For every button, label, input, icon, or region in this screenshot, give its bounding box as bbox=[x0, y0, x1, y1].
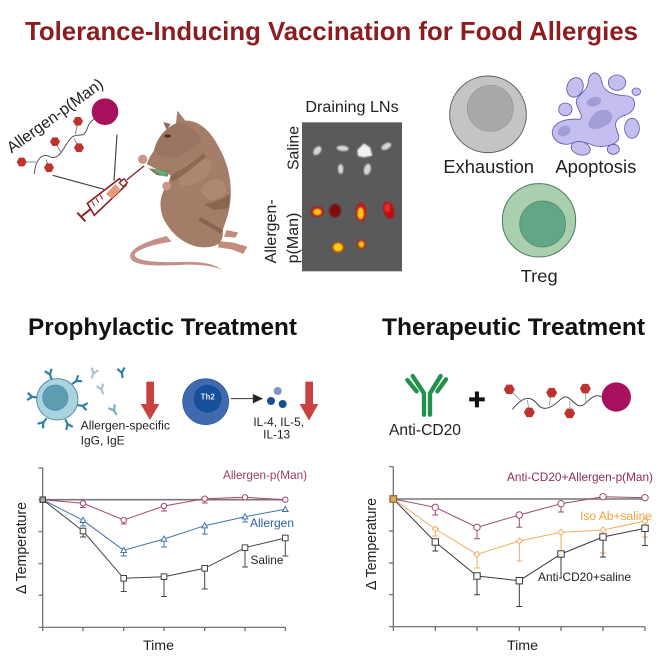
label: Anti-CD20+saline: Anti-CD20+saline bbox=[538, 570, 631, 584]
icon: mouse bbox=[130, 111, 247, 270]
baseline bbox=[393, 498, 645, 500]
first data point bbox=[40, 497, 45, 502]
zoom lines bbox=[53, 135, 117, 189]
icon: cytokines bbox=[267, 387, 287, 408]
plus sign: + bbox=[468, 383, 486, 416]
axes bbox=[38, 468, 285, 631]
icon: Th2 cell bbox=[183, 379, 229, 425]
label: Exhaustion: Exhaustion bbox=[443, 156, 534, 177]
chart: prophylactic temperature bbox=[14, 468, 307, 653]
label: Treg: Treg bbox=[521, 266, 558, 286]
x-axis label: Time bbox=[507, 637, 538, 653]
series: Allergen-p(Man) bbox=[43, 495, 288, 524]
panel: cell outcomes bbox=[443, 73, 641, 286]
baseline bbox=[43, 499, 285, 501]
arrow: Th2 to cytokines bbox=[231, 395, 262, 403]
label: Allergen-p(Man): Allergen-p(Man) bbox=[223, 469, 307, 482]
arrow: decrease in cytokines bbox=[300, 382, 318, 421]
series: Allergen bbox=[43, 500, 288, 556]
panel: draining lymph nodes bbox=[263, 99, 402, 271]
icon: polymer conjugate bbox=[504, 382, 631, 418]
panel: prophylactic mechanism bbox=[27, 368, 318, 448]
icon: apoptotic cell bbox=[552, 73, 641, 157]
series: Saline bbox=[43, 500, 288, 596]
series: Anti-CD20+saline bbox=[393, 499, 648, 606]
panel: vaccination illustration bbox=[4, 76, 247, 270]
icon: B cell with antibodies bbox=[27, 368, 126, 430]
y-axis label: Δ Temperature bbox=[364, 498, 380, 590]
label: Saline: Saline bbox=[286, 126, 303, 170]
label: IL-4, IL-5, IL-13: IL-4, IL-5, bbox=[253, 415, 304, 429]
icon: Treg cell bbox=[502, 184, 576, 257]
icon: exhausted cell bbox=[450, 76, 526, 153]
heading: Prophylactic Treatment: Prophylactic Treatment bbox=[28, 314, 297, 341]
label: Apoptosis: Apoptosis bbox=[555, 156, 636, 177]
image: lymph node scan bbox=[302, 122, 402, 271]
icon: syringe bbox=[77, 166, 144, 221]
icon: Th2 cell: Th2 bbox=[201, 393, 215, 402]
label: Allergen-p(Man): Allergen-p(Man) bbox=[4, 76, 107, 157]
icon: polymer conjugate bbox=[17, 98, 118, 174]
x-axis label: Time bbox=[143, 637, 174, 653]
arrow: decrease in antibodies bbox=[141, 382, 159, 420]
label: Anti-CD20+Allergen-p(Man): Anti-CD20+Allergen-p(Man) bbox=[507, 470, 653, 484]
heading: Therapeutic Treatment: Therapeutic Treatment bbox=[382, 314, 645, 341]
label: Iso Ab+saline: Iso Ab+saline bbox=[580, 509, 652, 523]
label: Allergen-p(Man): Allergen- bbox=[263, 199, 280, 263]
label: IL-4, IL-5, IL-13: IL-13 bbox=[263, 428, 291, 442]
label: Anti-CD20: Anti-CD20 bbox=[389, 422, 461, 439]
y-axis label: Δ Temperature bbox=[14, 502, 30, 594]
first data point bbox=[390, 496, 397, 502]
axes bbox=[389, 467, 645, 631]
label: Allergen-p(Man): p(Man) bbox=[285, 213, 302, 263]
series: Anti-CD20+Allergen-p(Man) bbox=[393, 494, 648, 539]
label: Allergen-specific IgG, IgE: IgG, IgE bbox=[81, 434, 125, 448]
label: Draining LNs: Draining LNs bbox=[305, 99, 399, 116]
icon: Anti-CD20 antibody bbox=[407, 376, 446, 415]
panel: therapeutic mechanism bbox=[389, 376, 631, 439]
chart: therapeutic temperature bbox=[364, 467, 653, 653]
title: Tolerance-Inducing Vaccination for Food Allergies bbox=[25, 18, 638, 46]
label: Allergen: Allergen bbox=[250, 516, 294, 530]
label: Allergen-specific IgG, IgE: Allergen-specific bbox=[81, 418, 170, 432]
label: Saline: Saline bbox=[250, 553, 284, 567]
series: Iso Ab+saline bbox=[393, 499, 648, 568]
